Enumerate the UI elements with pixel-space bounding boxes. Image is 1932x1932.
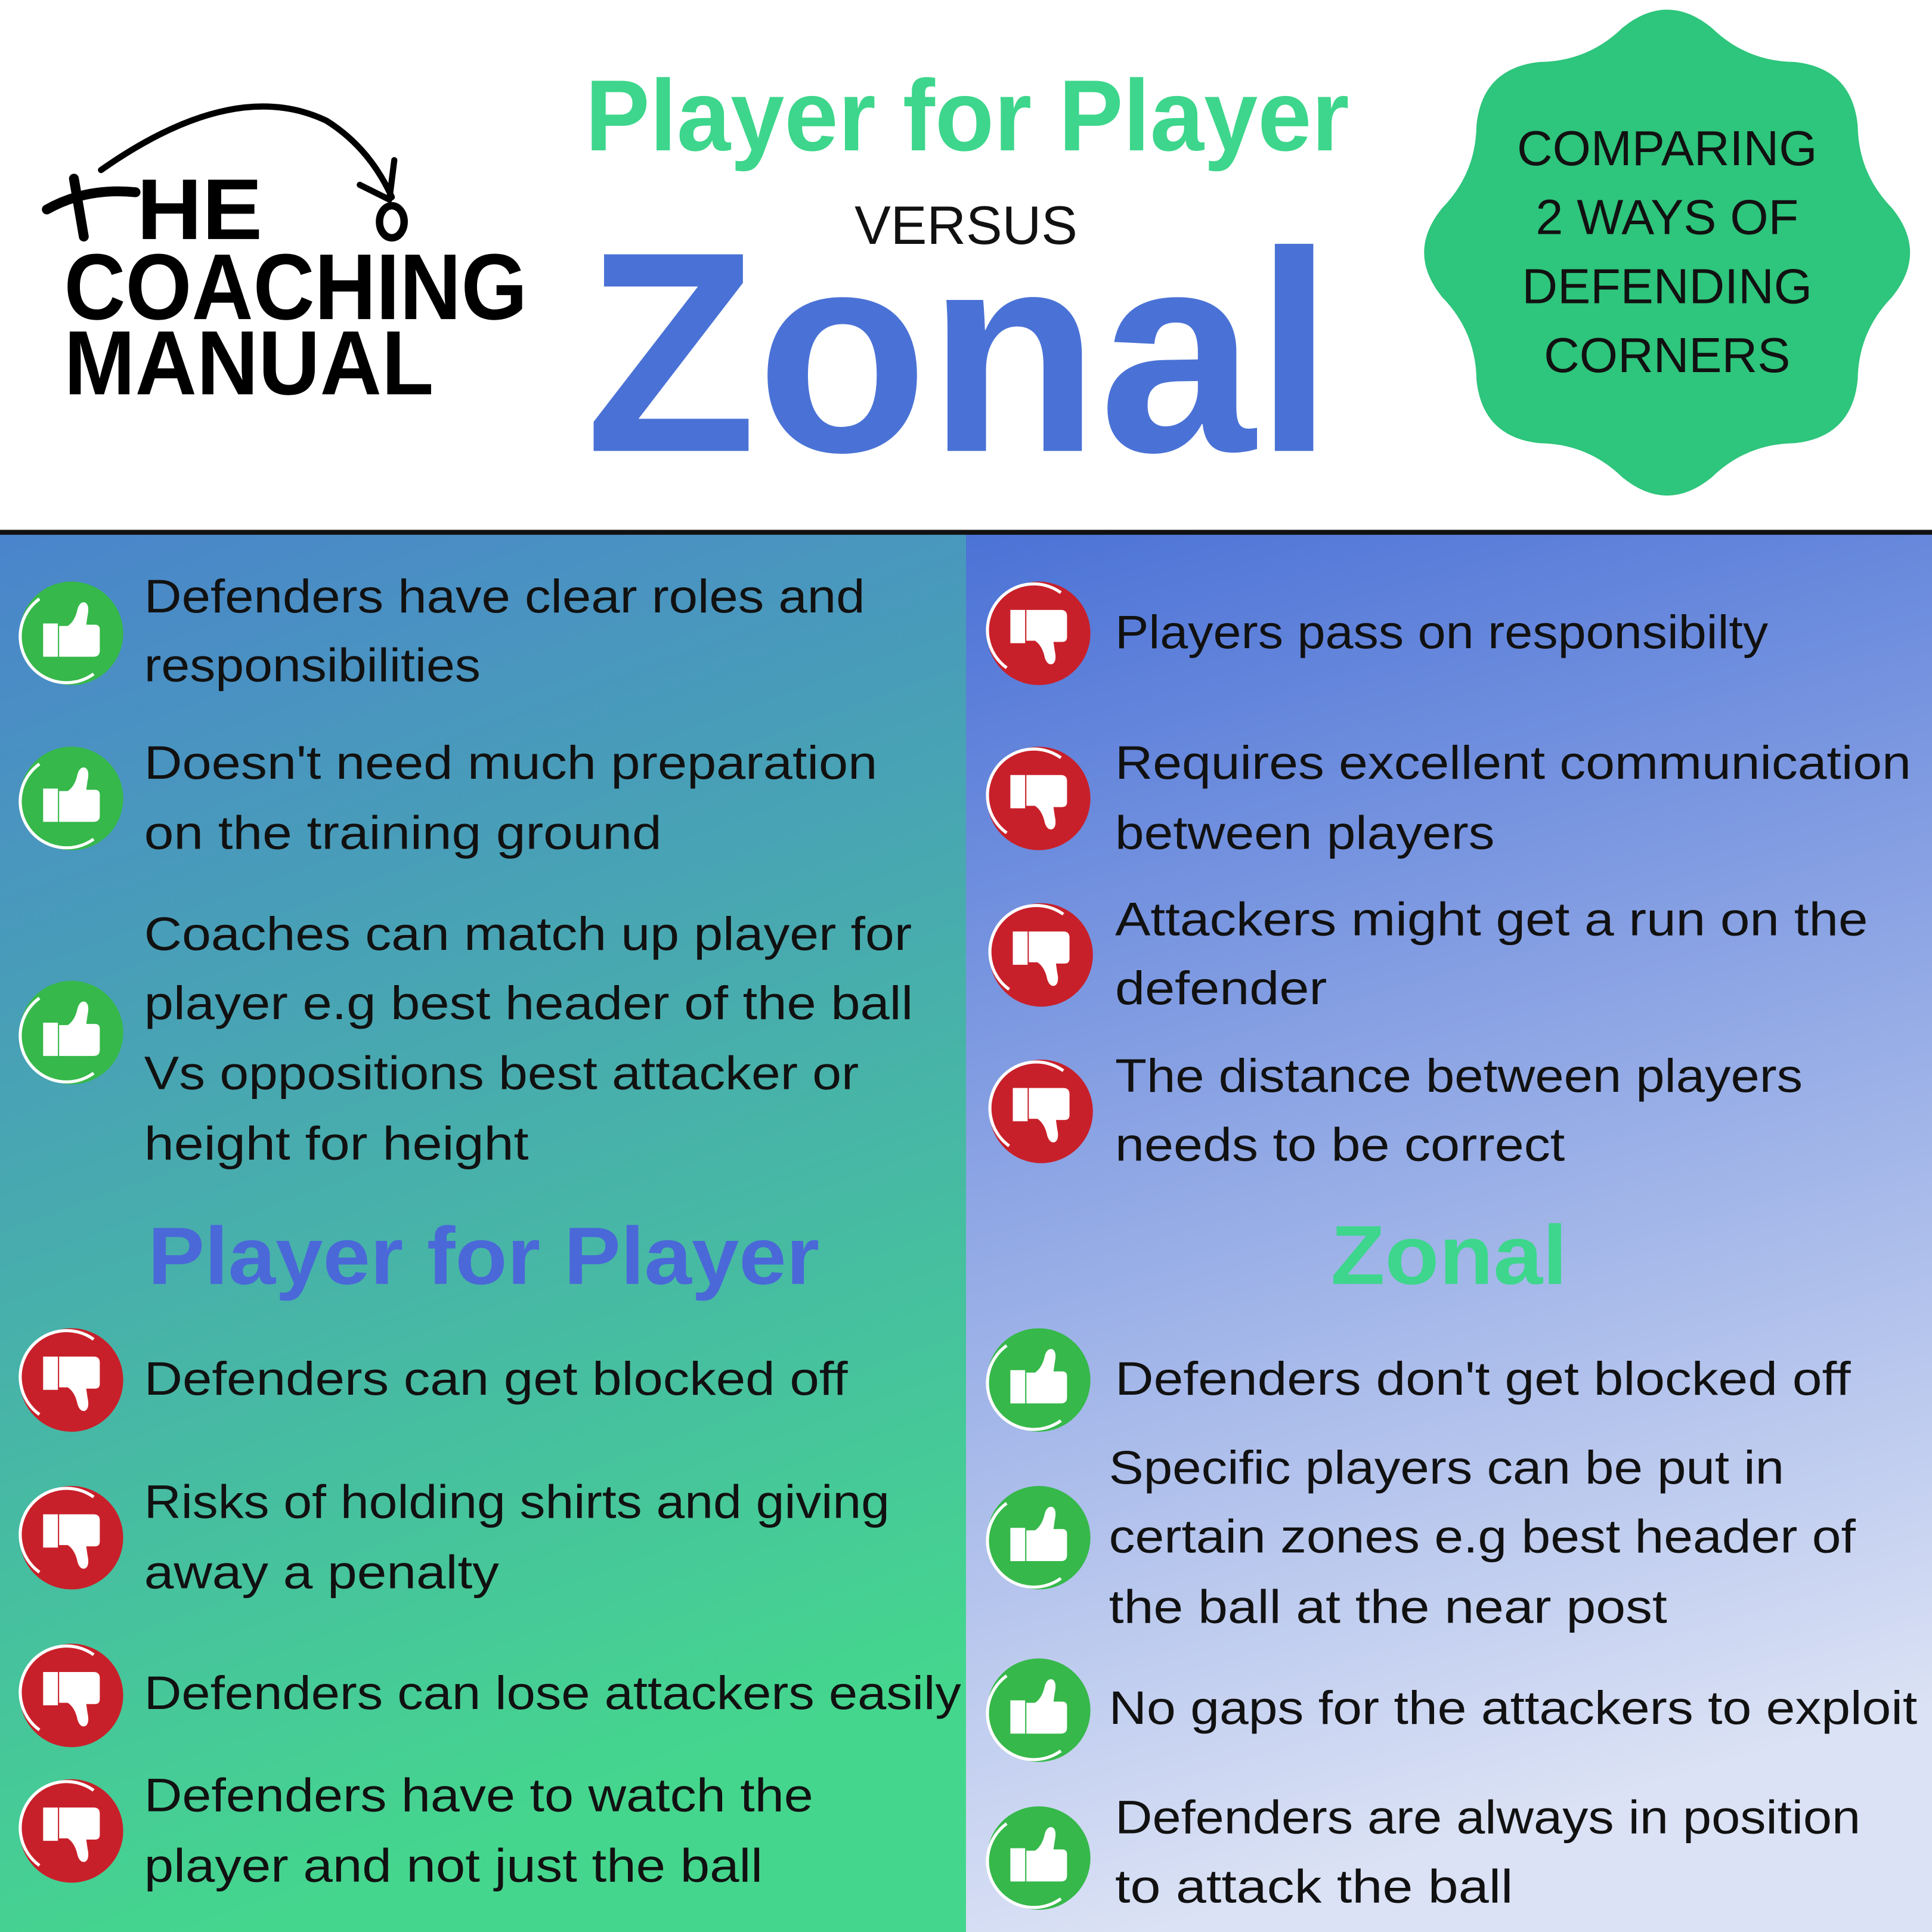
- logo: The Coaching Manual: COACHING: [64, 235, 527, 339]
- text block: right list: defender: [1115, 962, 1327, 1014]
- text block: left list: responsibilities: [144, 639, 481, 692]
- badge: comparing 2 ways: COMPARING: [1517, 120, 1817, 176]
- text block: left list: height for height: [144, 1117, 529, 1169]
- subtitle: VERSUS: VERSUS: [854, 196, 1078, 256]
- logo: The Coaching Manual: HE: [137, 161, 262, 258]
- text block: right list: needs to be correct: [1115, 1118, 1565, 1171]
- logo: The Coaching Manual: MANUAL: [64, 312, 434, 414]
- text block: left list: Coaches can match up player for: [144, 908, 912, 960]
- text block: left list: Vs oppositions best attacker or: [144, 1047, 859, 1100]
- text block: right list: the ball at the near post: [1109, 1580, 1667, 1633]
- badge: comparing 2 ways: DEFENDING: [1522, 258, 1812, 314]
- text block: right list: Players pass on responsibilty: [1115, 606, 1769, 658]
- text block: right list: to attack the ball: [1115, 1860, 1513, 1912]
- title: Player for Player: Player for Player: [586, 59, 1349, 172]
- text block: left list: Risks of holding shirts and giving: [144, 1476, 890, 1528]
- text block: left list: away a penalty: [144, 1546, 500, 1598]
- text block: right list: The distance between players: [1115, 1049, 1803, 1102]
- text block: left list: player and not just the ball: [144, 1839, 763, 1891]
- heading: Player for Player (left section): Player for Player: [148, 1210, 819, 1301]
- text block: left list: Defenders can lose attackers easily: [144, 1667, 962, 1719]
- icons: thumbs up (green): [20, 581, 1091, 1910]
- title: Zonal: Zonal: [586, 192, 1333, 512]
- text block: right list: No gaps for the attackers to exploit: [1109, 1682, 1917, 1734]
- text block: left list: player e.g best header of the ball: [144, 977, 913, 1029]
- text block: right list: between players: [1115, 807, 1494, 859]
- icons: thumbs down (red): [20, 581, 1093, 1883]
- text block: right list: Attackers might get a run on the: [1115, 893, 1868, 945]
- text block: right list: Defenders are always in position: [1115, 1791, 1860, 1844]
- panel: left background: [0, 532, 966, 1932]
- text block: left list: Doesn't need much preparation: [144, 736, 877, 789]
- badge: comparing 2 ways: [1424, 10, 1910, 496]
- text block: left list: on the training ground: [144, 807, 662, 859]
- text block: right list: [1109, 606, 1917, 1912]
- text block: left list: [144, 570, 962, 1891]
- text block: right list: certain zones e.g best header of: [1109, 1510, 1856, 1563]
- badge: comparing 2 ways: 2 WAYS OF: [1535, 190, 1798, 245]
- text block: right list: Requires excellent communication: [1115, 736, 1911, 789]
- text block: right list: Specific players can be put in: [1109, 1441, 1784, 1494]
- logo: The Coaching Manual: [47, 107, 527, 414]
- text block: left list: Defenders have clear roles and: [144, 570, 865, 623]
- text block: left list: Defenders can get blocked off: [144, 1352, 848, 1405]
- panel: right background: [966, 532, 1932, 1932]
- text block: left list: Defenders have to watch the: [144, 1769, 813, 1822]
- badge: comparing 2 ways: CORNERS: [1544, 327, 1790, 383]
- heading: Zonal (right section): Zonal: [1331, 1208, 1567, 1302]
- text block: right list: Defenders don't get blocked off: [1115, 1352, 1851, 1405]
